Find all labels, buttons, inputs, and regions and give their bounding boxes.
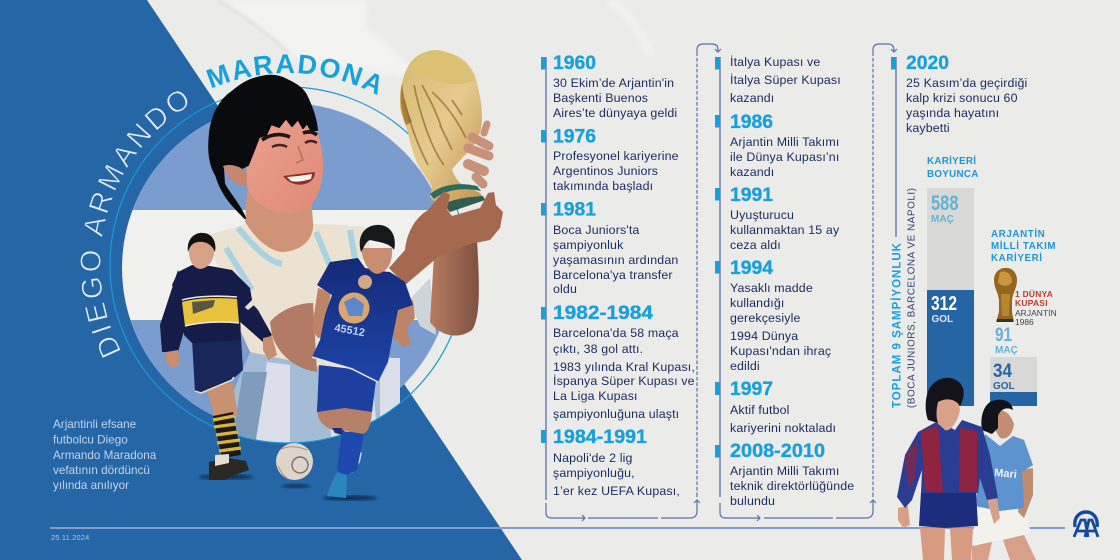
timeline column 2: edildi	[730, 359, 760, 373]
vertical championship label	[890, 188, 918, 408]
timeline column 1: Profesyonel kariyerine	[553, 149, 679, 163]
timeline column 2: kazandı	[730, 91, 774, 105]
barcelona player photo	[897, 378, 1000, 560]
timeline column 1: şampiyonluğu,	[553, 466, 635, 480]
shorts	[192, 338, 243, 393]
national team bar chart: GOL	[993, 381, 1015, 392]
timeline column 1: 1’er kez UEFA Kupası,	[553, 484, 680, 498]
timeline column 1	[553, 53, 695, 498]
shorts	[317, 365, 377, 412]
timeline column 1: şampiyonluğuna ulaştı	[553, 407, 679, 421]
napoli player photo	[972, 400, 1036, 560]
timeline column 2: 1991	[730, 185, 773, 206]
timeline column 1: Barcelona'da 58 maça	[553, 326, 679, 340]
timeline column 1: Aires’te dünyaya geldi	[553, 106, 677, 120]
jersey	[312, 258, 413, 382]
timeline column 1: 30 Ekim’de Arjantin'in	[553, 76, 674, 90]
timeline column 2: kariyerini noktaladı	[730, 421, 836, 435]
national team heading	[991, 229, 1056, 264]
intro text	[53, 418, 157, 492]
career heading: KARİYERİ	[927, 156, 976, 167]
timeline column 2	[730, 55, 854, 508]
national team heading: ARJANTİN	[991, 229, 1045, 240]
national team bar chart: 91	[995, 324, 1012, 346]
legs and socks	[205, 384, 238, 418]
timeline column 1: İspanya Süper Kupası ve	[553, 374, 695, 388]
jersey	[172, 265, 252, 343]
world cup note: 1 DÜNYA	[1015, 289, 1053, 299]
intro text: Arjantinli efsane	[53, 418, 136, 431]
timeline column 2: kazandı	[730, 165, 774, 179]
timeline column 3: 2020	[906, 53, 949, 74]
timeline column 2: 1994	[730, 258, 773, 279]
timeline column 3: yaşında hayatını	[906, 106, 999, 120]
timeline column 1: Barcelona'ya transfer	[553, 268, 673, 282]
timeline column 2: 1994 Dünya	[730, 329, 798, 343]
icon: small trophy	[994, 268, 1017, 322]
timeline column 2: Kupası'ndan ihraç	[730, 344, 831, 358]
ear	[223, 165, 247, 186]
timeline column 1: şampiyonluk	[553, 238, 624, 252]
world cup note	[1015, 289, 1057, 327]
timeline column 1: çıktı, 38 gol attı.	[553, 342, 643, 356]
timeline markers	[541, 57, 896, 458]
forearm in front of shirt	[270, 303, 317, 372]
timeline column 1: Napoli'de 2 lig	[553, 451, 633, 465]
timeline column 1: Argentinos Juniors	[553, 164, 658, 178]
vertical championship label: (BOCA JUNIORS, BARCELONA VE NAPOLI)	[906, 188, 918, 408]
arms	[160, 270, 190, 352]
timeline column 2: teknik direktörlüğünde	[730, 479, 854, 493]
main photo: maradona with trophy	[110, 50, 503, 450]
world cup note: ARJANTİN	[1015, 308, 1057, 318]
timeline column 2: Uyuşturucu	[730, 208, 794, 222]
timeline column 1: 1982-1984	[553, 303, 653, 324]
world cup note: 1986	[1015, 317, 1034, 327]
timeline connectors	[546, 44, 897, 521]
career bar chart: 312	[931, 293, 957, 315]
intro text: yılında anılıyor	[53, 479, 129, 492]
head	[361, 248, 392, 274]
career bar chart: MAÇ	[931, 214, 954, 225]
lower shirt stripes	[232, 352, 400, 450]
timeline column 2: 1986	[730, 112, 773, 133]
timeline column 2: Aktif futbol	[730, 403, 790, 417]
timeline column 2: ceza aldı	[730, 238, 781, 252]
upper shirt	[210, 224, 378, 372]
back arm	[409, 278, 436, 335]
back leg	[317, 405, 352, 432]
timeline column 2: İtalya Kupası ve	[730, 55, 820, 69]
career bar chart: GOL	[932, 314, 953, 325]
timeline column 2: kullandığı	[730, 296, 784, 310]
timeline column 1: La Liga Kupası	[553, 389, 638, 403]
timeline column 1: Boca Juniors'ta	[553, 223, 639, 237]
national team heading: KARİYERİ	[991, 253, 1043, 264]
career bar chart	[927, 188, 974, 406]
timeline column 2: İtalya Süper Kupası	[730, 73, 841, 87]
front arm and hand	[389, 191, 503, 285]
timeline column 1: 1983 yılında Kral Kupası,	[553, 360, 695, 374]
blue kit player	[312, 225, 415, 500]
timeline column 2: gerekçesiyle	[730, 311, 801, 325]
front leg	[342, 405, 372, 434]
timeline column 3: kalp krizi sonucu 60	[906, 91, 1018, 105]
timeline column 3: kaybetti	[906, 121, 950, 135]
timeline column 2: 2008-2010	[730, 441, 825, 462]
timeline column 2: Arjantin Milli Takımı	[730, 464, 839, 478]
logo: AA	[1074, 512, 1098, 537]
timeline column 1: oldu	[553, 282, 577, 296]
arms	[312, 288, 415, 347]
career heading	[927, 156, 979, 180]
timeline column 1: 1960	[553, 53, 596, 74]
timeline column 1: takımında başladı	[553, 179, 653, 193]
hair	[209, 76, 317, 218]
blue diagonal panel	[0, 0, 522, 560]
timeline column 1: 1976	[553, 126, 596, 148]
timeline column 2: Yasaklı madde	[730, 281, 813, 295]
flag circle	[122, 104, 440, 416]
national team bar chart: MAÇ	[995, 345, 1018, 356]
timeline column 1: 1981	[553, 200, 596, 220]
timeline column 2: 1997	[730, 379, 773, 400]
face	[246, 112, 323, 214]
timeline column 1: yaşamasının ardından	[553, 253, 678, 267]
title: maradona: MARADONA	[206, 54, 380, 95]
timeline column 3	[906, 53, 1027, 135]
national team bar chart	[990, 324, 1037, 406]
boca juniors player	[160, 233, 277, 480]
blue kit player: 45512	[333, 322, 366, 339]
intro text: futbolcu Diego	[53, 434, 128, 446]
career heading: BOYUNCA	[927, 169, 979, 180]
timeline column 1: Başkenti Buenos	[553, 91, 648, 105]
intro text: Armando Maradona	[53, 449, 157, 462]
timeline column 2: Arjantin Milli Takımı	[730, 135, 839, 149]
fingers holding trophy	[468, 124, 489, 184]
facial features	[262, 132, 317, 140]
neck	[245, 190, 313, 252]
title: diego armando: DIEGO ARMANDO	[80, 91, 188, 358]
timeline column 2: ile Dünya Kupası’nı	[730, 150, 839, 164]
national team heading: MİLLİ TAKIM	[991, 241, 1056, 252]
national team bar chart: 34	[993, 360, 1012, 382]
timeline column 2: bulundu	[730, 494, 775, 508]
career bar chart: 588	[931, 192, 959, 215]
date and baseline: 25.11.2024	[51, 533, 89, 542]
timeline column 3: 25 Kasım’da geçirdiği	[906, 76, 1027, 90]
trophy	[400, 50, 485, 213]
vertical championship label: TOPLAM 9 ŞAMPİYONLUK	[890, 242, 904, 408]
intro text: vefatının dördüncü	[53, 464, 150, 477]
timeline column 1: 1984-1991	[553, 427, 647, 448]
timeline column 2: kullanmaktan 15 ay	[730, 223, 840, 237]
napoli player photo: Mari	[994, 467, 1017, 481]
ball	[276, 443, 313, 488]
head	[189, 242, 214, 269]
world cup note: KUPASI	[1015, 298, 1048, 308]
